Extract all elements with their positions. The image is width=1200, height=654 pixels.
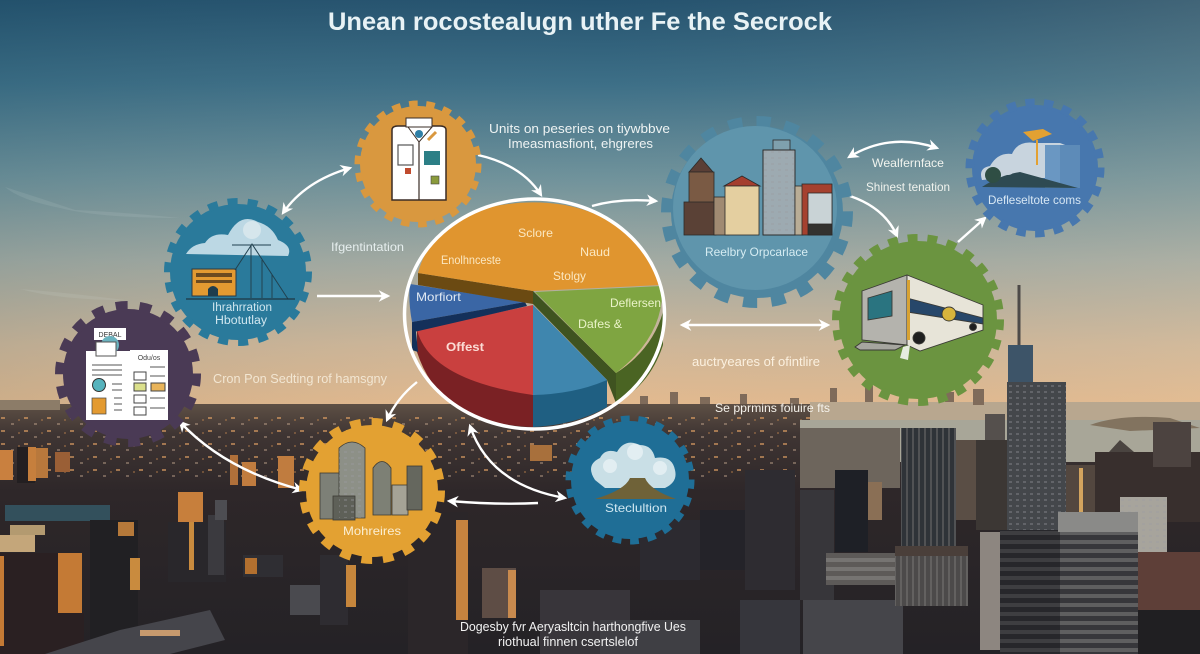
pie chart labels: Enolhnceste [441,253,501,267]
icon: skyscrapers [320,442,422,520]
label: gear cloud: Steclultion [605,501,667,515]
pie chart ring [404,199,664,429]
icon: open book: Odu/os [138,355,161,362]
label: gear city block: Reelbry Orpcarlace [705,245,808,259]
background tower spire [1007,285,1066,532]
caption: upper right: Wealfernface [872,156,944,170]
gear: purple, document book [60,306,196,442]
left district [0,450,13,480]
background city skyline [0,285,1200,654]
pie chart labels [416,226,661,354]
icon: coat [392,118,446,200]
icon: mortarboard and cloud [981,129,1080,188]
gear: large blue, city block [667,122,847,302]
pie chart labels: Deflersen [610,296,661,310]
label: gear information [212,302,272,327]
label: gear information: Ihrahrration [212,302,272,314]
pie chart face and sides [409,202,663,427]
caption: right lower: Se pprmins foiuire fts [715,401,830,415]
icon: open book: DEBAL [99,332,122,339]
gear: teal left, information [168,202,308,342]
pie chart labels: Offest [446,340,484,354]
gear: green, bus [837,239,999,401]
pie chart labels: Sclore [518,226,553,240]
caption: bottom: riothual finnen csertslelof [498,635,639,649]
caption: left lower: Cron Pon Sedting rof hamsgny [213,372,388,386]
label: gear buildings: Mohreires [343,524,401,538]
pie chart labels: Morfiort [416,290,462,304]
title: Unean rocostealugn uther Fe the Secrock [328,8,832,36]
gear: teal lower, cloud [569,419,691,541]
gear: amber lower, buildings [304,423,440,559]
caption: top center: Units on peseries on tiywbbve [489,122,670,136]
icon: cloud and building [186,219,295,299]
right district [800,490,834,600]
gear: blue top right, education cloud [970,103,1100,233]
arrow connectors [180,142,985,504]
background sky [0,0,1200,420]
caption: top center: Imeasmasfiont, ehgreres [508,137,653,151]
caption: left upper: Ifgentintation [331,240,404,254]
gear: top orange, coat icon [358,104,478,224]
caption: top center [489,122,670,151]
pie chart [404,199,664,429]
caption: bottom [460,620,686,649]
caption: bottom: Dogesby fvr Aeryasltcin harthongfive Ues [460,620,686,634]
icon: city buildings [684,140,832,235]
caption: right middle: auctryeares of ofintlire [692,355,820,369]
pie chart labels: Naud [580,245,610,259]
icon: bus [855,275,983,360]
label: gear education: Defleseltote coms [988,193,1081,207]
icon: cloud over hill [591,443,676,499]
pie chart labels: Dafes & [578,317,622,331]
pie chart labels: Stolgy [553,269,586,283]
caption: upper right: Shinest tenation [866,180,950,194]
caption: upper right [866,156,950,194]
label: gear information: Hbotutlay [215,315,267,327]
centre district [320,555,348,625]
icon: open book [86,328,168,420]
